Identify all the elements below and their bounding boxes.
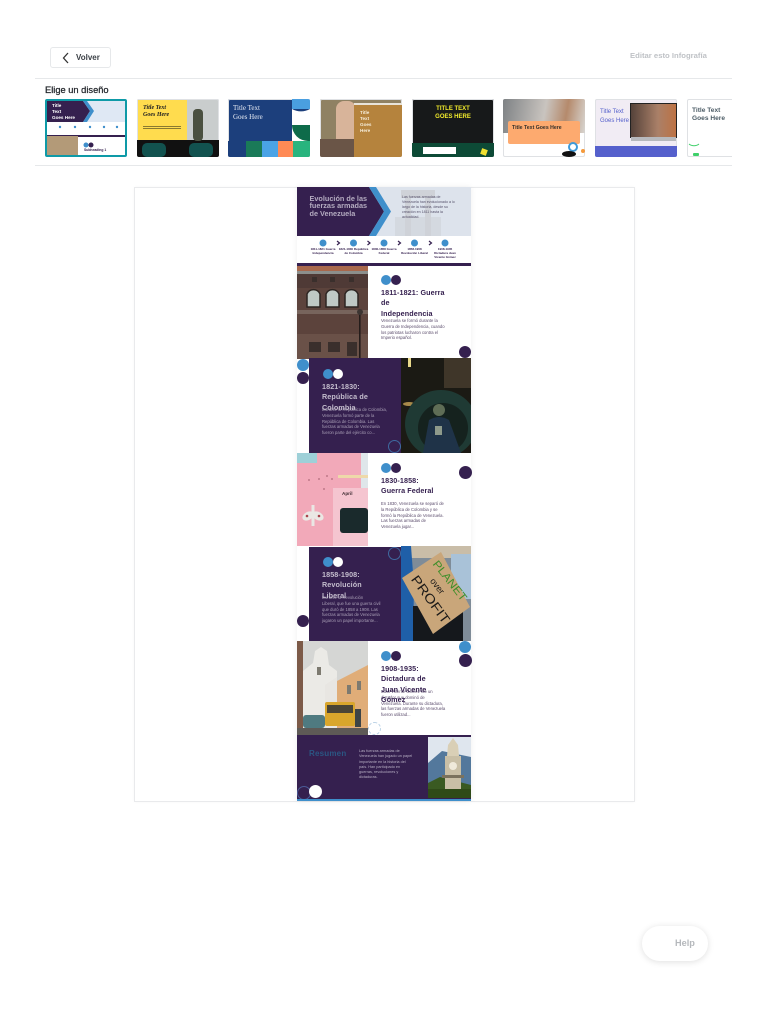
number badge (381, 463, 401, 473)
thumbnail 1 selected: Goes Here (52, 115, 75, 120)
thumbnail 2 yellow: Title Text (143, 105, 166, 111)
step label 4 (401, 247, 428, 255)
step label 2: 1821-1830 República (339, 247, 368, 251)
thumbnail 2 yellow: Goes Here (143, 112, 169, 118)
body text: jugaron un papel importante... (322, 618, 378, 623)
photo: protest sign: over (428, 576, 447, 596)
infographic (297, 187, 471, 801)
thumbnail 4 tan (320, 99, 402, 157)
heading: Juan Vicente (381, 685, 426, 694)
heading: Guerra Federal (381, 486, 434, 495)
body text: Venezuela se formó durante la (381, 318, 438, 323)
body text: En 1830, Venezuela se separó de (381, 501, 444, 506)
body text: formó la República de Venezuela. (381, 513, 444, 518)
body text: las fuerzas armadas de Venezuela (381, 706, 445, 711)
body text: fueron parte del ejército co... (322, 430, 375, 435)
header chevron (297, 187, 391, 236)
heading (381, 476, 434, 495)
step markers and arrows (320, 240, 448, 246)
thumbnail 4 tan: Text (360, 116, 369, 121)
step label 5: Dictadura Juan (434, 251, 456, 255)
thumbnail 4 tan: Title (360, 110, 369, 115)
thumbnail 2 yellow (137, 99, 219, 157)
step label 2: de Colombia (344, 251, 362, 255)
photo: brick building (297, 266, 368, 359)
body text: fuerzas armadas de Venezuela (322, 612, 380, 617)
number badge (381, 651, 401, 661)
heading: 1821-1830: (322, 382, 360, 391)
heading (322, 382, 368, 412)
decorative ring (368, 722, 381, 735)
step label 5: Vicente Gómez (434, 255, 456, 259)
heading: de (381, 298, 390, 307)
decorative white dot (309, 785, 322, 798)
summary text: Las fuerzas armadas de (359, 749, 400, 753)
body text: Durante la Revolución (322, 595, 363, 600)
thumbnail 3 navy (228, 99, 310, 157)
body text: que duró de 1858 a 1908. Las (322, 607, 378, 612)
thumbnail 1 selected (45, 99, 127, 157)
body text: Venezuela formó parte de la (322, 413, 374, 418)
photo: protest sign: PROFIT (408, 572, 453, 626)
body text (381, 318, 445, 340)
body text (381, 501, 444, 529)
step label 4: Revolución Liberal (401, 251, 428, 255)
back button (50, 47, 111, 68)
bottom blue bar (297, 799, 471, 801)
thumbnail 8 white: Goes Here (692, 114, 725, 122)
photo: dark scene (401, 358, 471, 453)
intro text: actualidad. (402, 215, 419, 219)
heading: Colombia (322, 403, 356, 412)
heading (381, 664, 426, 704)
thumbnail 3 navy: Goes Here (233, 112, 263, 120)
body text (322, 407, 387, 435)
intro text: creación en 1811 hasta la (402, 210, 443, 214)
thumbnail 5 black and yellow: GOES HERE (435, 114, 471, 120)
heading: Gómez (381, 695, 405, 704)
step label 3: Federal (379, 251, 389, 255)
photo: clock tower (428, 737, 471, 798)
decorative ring (388, 440, 401, 453)
back label: Volver (76, 53, 100, 62)
section 1: Guerra de Independencia (297, 266, 471, 359)
summary text: guerras, revoluciones y (359, 770, 398, 774)
thumbnail 7 lilac: Goes Here (600, 118, 629, 124)
heading (381, 288, 445, 318)
template thumbnail strip (45, 99, 732, 157)
header panel (297, 187, 471, 236)
preview frame (134, 187, 635, 802)
summary heading: Resumen (309, 749, 346, 758)
title: Evolución de las (310, 194, 367, 203)
decorative dot (459, 466, 472, 479)
body text: República de Colombia. Las (322, 419, 374, 424)
step label 2 (338, 247, 368, 255)
thumbnail 5 black and yellow: TITLE TEXT (436, 106, 470, 112)
help button (642, 926, 708, 961)
heading: 1830-1858: (381, 476, 419, 485)
step label 3 (371, 247, 397, 255)
body text (322, 595, 380, 623)
step label 5 (434, 247, 456, 259)
title: de Venezuela (310, 209, 355, 218)
body text: Liberal, que fue una guerra civil (322, 601, 380, 606)
decorative ring (297, 786, 311, 800)
intro text: largo de la historia, desde su (402, 205, 448, 209)
body text: fueron utilizad... (381, 712, 411, 717)
section 4: Revolución Liberal (297, 546, 471, 641)
summary text: importante en la historia del (359, 760, 406, 764)
step label 4: 1858-1908 (407, 247, 422, 251)
step label 3: 1830-1858 Guerra (371, 247, 397, 251)
thumbnail 4 tan: Here (360, 128, 370, 133)
photo: pink desk (297, 453, 368, 546)
summary panel (297, 735, 471, 799)
step label 1: 1811-1821 Guerra Independencia (311, 247, 335, 255)
decorative ring (388, 547, 401, 560)
number badge (381, 275, 401, 285)
body text: Venezuela jugar... (381, 524, 414, 529)
body text: Imperio español. (381, 335, 412, 340)
body text: los patriotas lucharon contra el (381, 330, 438, 335)
body text: dictador que dominó de (381, 695, 425, 700)
intro text (402, 195, 455, 219)
decorative dots (459, 641, 472, 667)
thumbnail 5 black and yellow (412, 99, 494, 157)
number badge (323, 557, 343, 567)
divider bar (297, 263, 471, 266)
calendar month label: April (342, 491, 352, 496)
thumbnail 3 navy: Title Text (233, 104, 260, 112)
decorative dots (297, 359, 309, 384)
intro text: Venezuela han evolucionado a lo (402, 200, 455, 204)
title: fuerzas armadas (310, 201, 367, 210)
thumbnail 6 peach (503, 99, 585, 157)
heading: Independencia (381, 309, 433, 318)
section 5: Dictadura de Juan Vicente Gómez (297, 641, 472, 735)
heading: Dictadura de (381, 674, 426, 683)
photo: protest sign (401, 546, 471, 641)
number badge (323, 369, 343, 379)
summary text: país. Han participado en (359, 765, 400, 769)
heading: 1858-1908: (322, 570, 360, 579)
body text: la República de Colombia y se (381, 507, 438, 512)
thumbnail 1 selected: Subheading 1 (84, 148, 106, 152)
thumbnail 8 white (687, 99, 768, 157)
body text (381, 689, 446, 717)
icon: back chevron (62, 52, 68, 64)
body text: Juan Vicente Gómez fue un (381, 689, 433, 694)
body text: Venezuela. Durante su dictadura, (381, 701, 443, 706)
header background monument (395, 190, 441, 236)
summary text (359, 749, 412, 781)
heading: 1908-1935: (381, 664, 419, 673)
thumbnail 7 lilac (595, 99, 677, 157)
decorative dot (459, 346, 471, 358)
heading: 1811-1821: Guerra (381, 288, 445, 297)
summary text: dictaduras. (359, 775, 378, 779)
thumbnail 8 white: Title Text (692, 107, 720, 114)
body text: Guerra de Independencia, cuando (381, 324, 445, 329)
heading: República de (322, 392, 368, 401)
thumbnail 1 selected: Text (52, 109, 61, 114)
title (310, 194, 367, 218)
thumbnail 4 tan: Goes (360, 122, 372, 127)
heading: Liberal (322, 591, 346, 600)
heading (322, 570, 362, 600)
step label 5: 1908-1935 (438, 247, 452, 251)
purple text panel (309, 547, 401, 641)
thumbnail 6 peach: Title Text Goes Here (512, 125, 562, 131)
help label: Help (675, 938, 695, 948)
thumbnail 7 lilac: Title Text (600, 109, 624, 115)
purple text panel (309, 358, 401, 453)
body text: fuerzas armadas de Venezuela (322, 424, 380, 429)
intro text: Las fuerzas armadas de (402, 195, 441, 199)
section 3: Guerra Federal (297, 453, 472, 546)
heading: Revolución (322, 580, 362, 589)
decorative dot (297, 615, 309, 627)
body text: Durante la República de Colombia, (322, 407, 387, 412)
section 2: República de Colombia (297, 358, 471, 453)
photo: street with tram (297, 641, 368, 735)
photo: protest sign: PLANET (430, 559, 469, 604)
summary text: Venezuela han jugado un papel (359, 754, 412, 758)
edit link: Editar esto Infografía (630, 51, 707, 60)
heading: choose a design: Elige un diseño (45, 85, 109, 95)
timeline stepper (310, 240, 456, 259)
thumbnail 1 selected: Title (52, 103, 61, 108)
body text: Las fuerzas armadas de (381, 518, 426, 523)
